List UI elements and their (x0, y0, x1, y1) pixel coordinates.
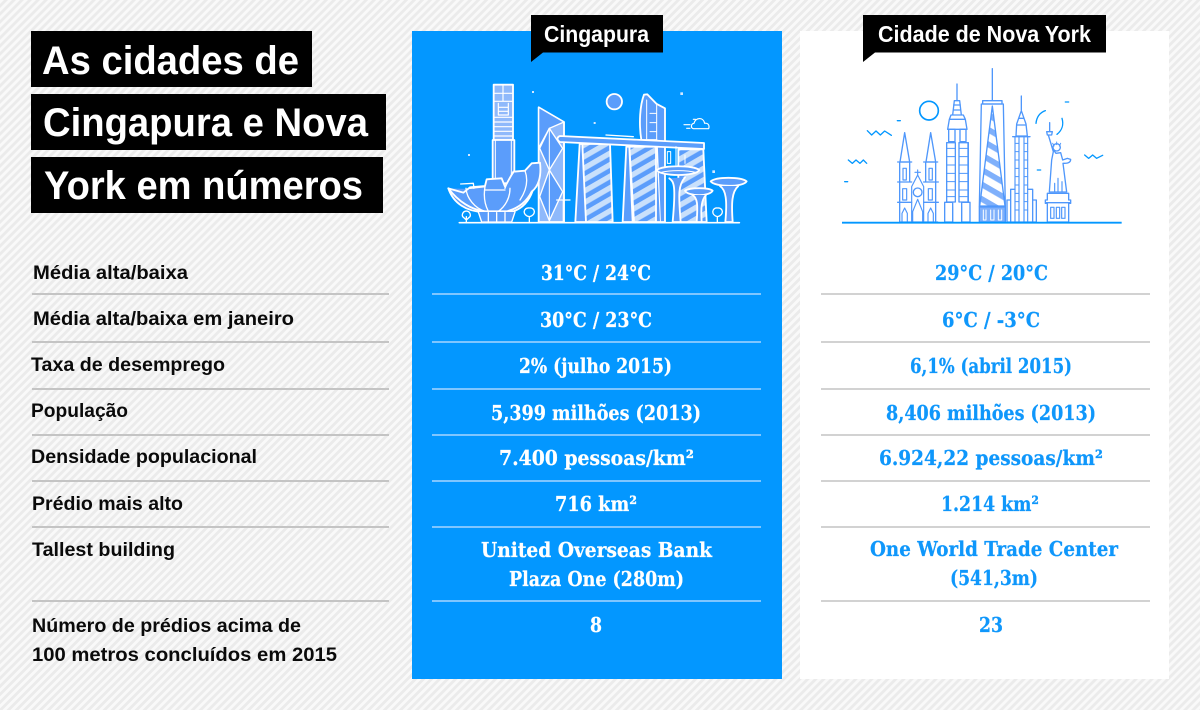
title: As cidades de (42, 39, 299, 83)
panel: Cingapura values: 7.400 pessoas/km² (499, 446, 694, 470)
panel: Cidade de Nova York (800, 15, 1169, 679)
panel: Nova York values: 1.214 km² (941, 492, 1039, 516)
panel: row labels: População (31, 400, 128, 422)
panel: Nova York values: 23 (979, 613, 1003, 637)
panel: Cingapura values: Plaza One (280m) (509, 567, 684, 591)
title: Cingapura e Nova (43, 101, 369, 145)
icon: Singapore skyline (448, 85, 747, 223)
panel: row labels: Taxa de desemprego (31, 354, 225, 376)
icon: New York skyline (842, 69, 1122, 223)
panel: Cingapura values: 2% (julho 2015) (519, 354, 672, 378)
panel: row labels: Prédio mais alto (32, 493, 183, 515)
panel: Cingapura values: 31°C / 24°C (541, 261, 651, 285)
tab: Cingapura: Cingapura (544, 21, 649, 47)
panel: row labels: Número de prédios acima de (32, 615, 301, 637)
tab: Cingapura (531, 15, 663, 62)
title (31, 31, 386, 213)
title: York em números (44, 164, 363, 208)
panel: row labels (31, 262, 389, 666)
panel: Cingapura values: United Overseas Bank (481, 538, 713, 562)
panel: Nova York values (821, 261, 1150, 637)
tab: Cidade de Nova York (863, 15, 1106, 62)
panel: Nova York values: One World Trade Center (870, 537, 1119, 561)
panel: Nova York values: 6,1% (abril 2015) (910, 354, 1072, 378)
panel: Nova York values: 6°C / -3°C (942, 308, 1040, 332)
tab: Cidade de Nova York: Cidade de Nova York (878, 21, 1091, 47)
panel: row labels: Densidade populacional (31, 446, 257, 468)
panel: Nova York values: (541,3m) (950, 566, 1038, 590)
panel: row labels: Média alta/baixa (33, 262, 188, 284)
panel: Cingapura values: 8 (590, 613, 602, 637)
panel: Cingapura values: 716 km² (555, 492, 637, 516)
panel: Cingapura values: 30°C / 23°C (540, 308, 652, 332)
panel: Cingapura values (432, 261, 761, 637)
panel: Cingapura (412, 15, 782, 679)
panel: Nova York values: 29°C / 20°C (935, 261, 1048, 285)
panel: Nova York values: 6.924,22 pessoas/km² (879, 446, 1103, 470)
panel: row labels: Média alta/baixa em janeiro (33, 308, 294, 330)
panel: row labels: 100 metros concluídos em 2015 (32, 644, 337, 666)
panel: Nova York values: 8,406 milhões (2013) (886, 401, 1096, 425)
panel: row labels: Tallest building (32, 539, 175, 561)
panel: Cingapura values: 5,399 milhões (2013) (491, 401, 701, 425)
